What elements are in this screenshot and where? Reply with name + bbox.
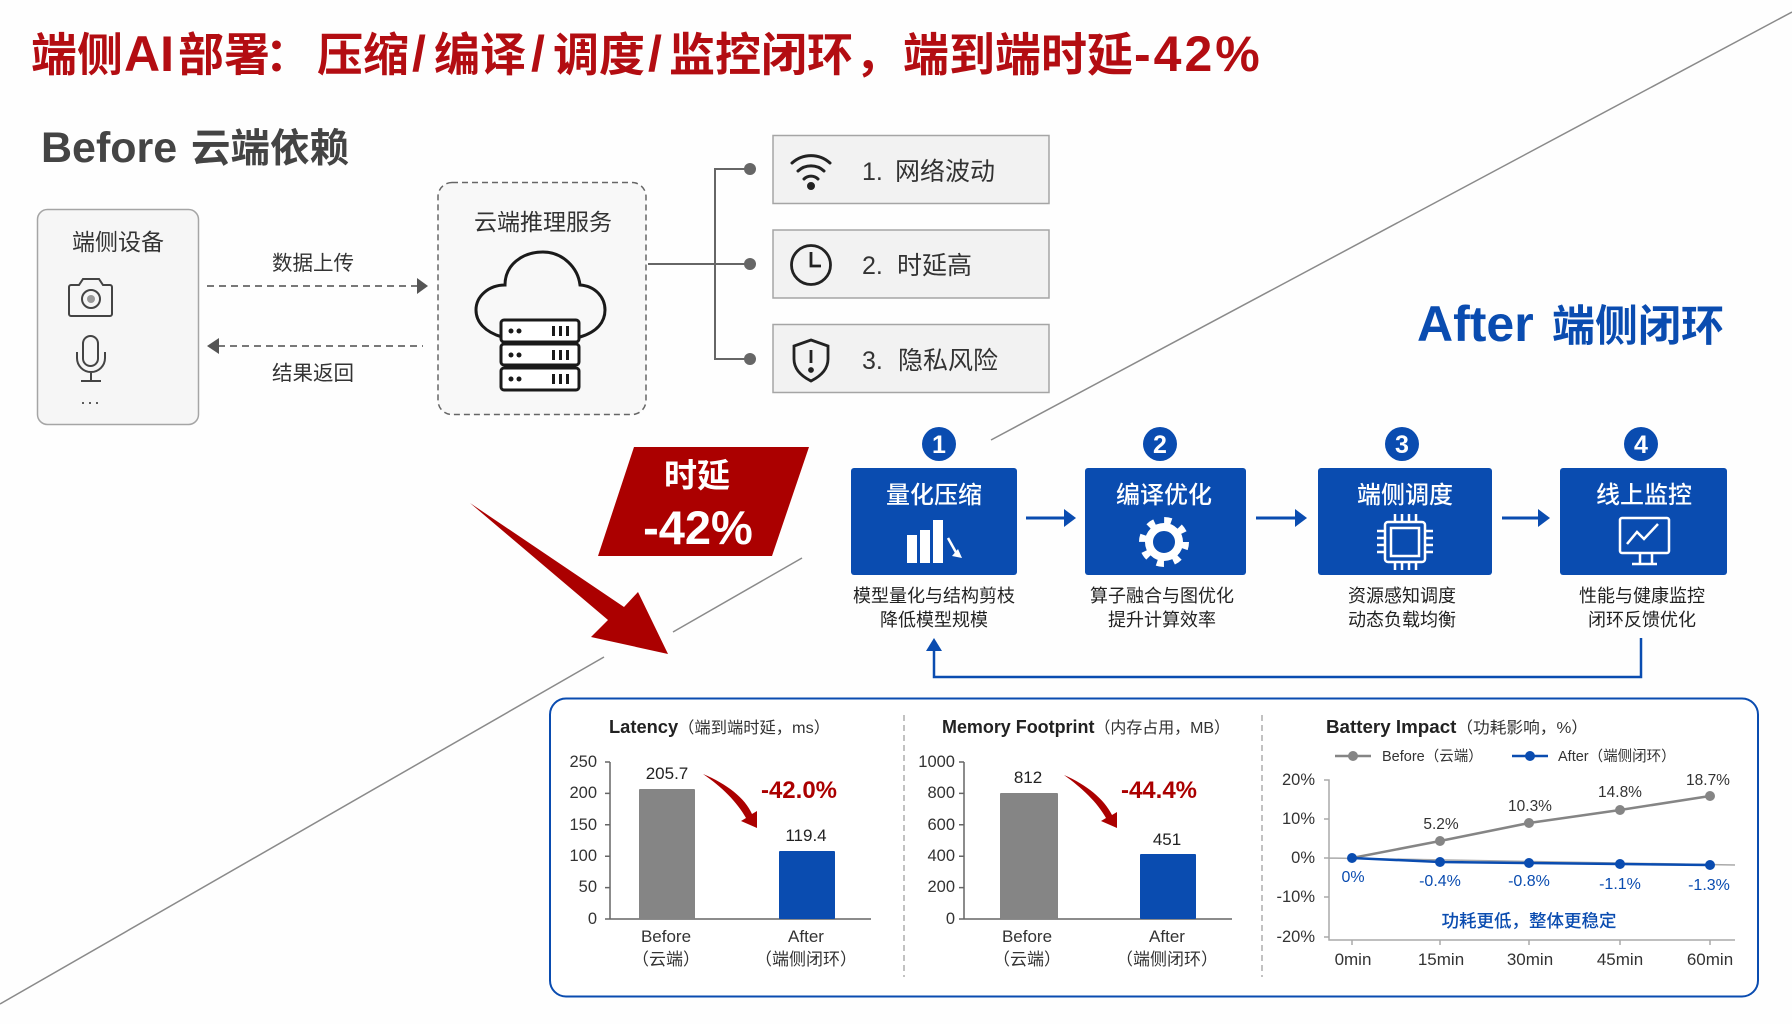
step 4: 线上监控	[1596, 482, 1692, 509]
step 1	[851, 427, 1017, 630]
icon: monitor	[1620, 518, 1669, 564]
chart: latency: 119.4	[785, 826, 827, 845]
chart: latency: Before	[641, 927, 691, 946]
bar: after	[779, 851, 835, 919]
chart: memory: 600	[927, 816, 955, 834]
chart: battery: 10%	[1282, 810, 1315, 828]
chart: latency: 50	[579, 878, 597, 896]
step 2 description: 提升计算效率	[1108, 610, 1216, 630]
step 2: 2	[1153, 431, 1167, 459]
step 3 description	[1348, 586, 1456, 630]
line: after	[1347, 853, 1715, 870]
chart: latency: 0	[588, 910, 597, 928]
chart: battery: 45min	[1597, 950, 1643, 969]
arrow: data upload	[207, 252, 428, 294]
arrow: feedback loop	[926, 638, 1641, 677]
chart: latency	[569, 717, 871, 969]
chart: memory: Before	[1002, 927, 1052, 946]
chart: battery: 60min	[1687, 950, 1733, 969]
step 2 description: 算子融合与图优化	[1090, 586, 1234, 606]
title: -42%	[1134, 26, 1263, 82]
step 4 description	[1579, 586, 1705, 630]
title: AI	[124, 26, 174, 82]
icon: clock	[792, 246, 830, 284]
step 4 description: 闭环反馈优化	[1588, 610, 1696, 630]
problem 1: network	[773, 136, 1049, 204]
title: 部署	[178, 29, 270, 81]
chart: battery: -0.8%	[1508, 873, 1550, 890]
chart: memory: 812	[1014, 768, 1042, 787]
title: 监控闭环	[669, 29, 853, 81]
chart: battery: 10.3%	[1508, 798, 1552, 815]
chart: latency: （云端）	[632, 950, 700, 969]
chart: memory: After	[1149, 927, 1185, 946]
chart: battery: 14.8%	[1598, 784, 1642, 801]
icon: cloud with servers	[476, 252, 605, 390]
panel: metrics	[550, 698, 1758, 996]
icon: shield	[794, 340, 828, 381]
arrow: step 1 to 2	[1026, 509, 1076, 527]
chart: battery: 0%	[1341, 869, 1365, 886]
title: ：	[265, 29, 311, 81]
chart: memory: （端侧闭环）	[1116, 950, 1218, 969]
callout: latency -42%	[598, 447, 809, 556]
arrow: data upload: 数据上传	[272, 252, 354, 275]
step 2: 编译优化	[1116, 482, 1212, 509]
legend	[1335, 748, 1676, 765]
delta label: -42.0%	[761, 777, 837, 804]
step 2 description	[1090, 586, 1234, 630]
chart: latency: 100	[569, 847, 597, 865]
chart title: Latency（端到端时延，ms）	[609, 717, 830, 737]
title: /	[648, 26, 662, 82]
chart title: Battery Impact （功耗影响，%）	[1326, 717, 1588, 737]
chart: battery: -1.3%	[1688, 877, 1730, 894]
chart: battery: 30min	[1507, 950, 1553, 969]
problem text: 隐私风险	[898, 347, 998, 375]
chart: battery	[1276, 717, 1735, 969]
chart: battery: 18.7%	[1686, 772, 1730, 789]
step 2	[1085, 427, 1246, 630]
heading: before: Before	[41, 124, 177, 172]
callout: latency -42%: -42%	[643, 501, 753, 554]
chart: latency: 250	[569, 753, 597, 771]
chart: memory: 451	[1153, 830, 1181, 849]
bar: before	[1000, 793, 1058, 919]
connector: problems bracket	[648, 163, 756, 365]
icon: wifi	[792, 156, 830, 188]
callout: latency -42%: 时延	[664, 457, 730, 494]
problem text: 1.	[862, 158, 883, 186]
step 4: 4	[1634, 431, 1648, 459]
delta label: -44.4%	[1121, 777, 1197, 804]
panel: cloud inference	[438, 182, 646, 414]
problem text: 2.	[862, 252, 883, 280]
title: /	[412, 26, 426, 82]
step 3 description: 动态负载均衡	[1348, 610, 1456, 630]
chart: latency: 150	[569, 816, 597, 834]
bar: before	[639, 789, 695, 919]
icon: gear	[1143, 521, 1185, 563]
step 4	[1560, 427, 1727, 630]
heading: after: After	[1417, 296, 1534, 352]
problem 3: privacy	[773, 324, 1049, 392]
chart: latency: （端侧闭环）	[755, 950, 857, 969]
chart: battery: 0%	[1291, 849, 1315, 867]
heading: before: 云端依赖	[191, 127, 349, 171]
legend: After（端侧闭环）	[1558, 748, 1676, 765]
chart: battery: -20%	[1276, 928, 1315, 946]
step 3 description: 资源感知调度	[1348, 586, 1456, 606]
step 1 description: 模型量化与结构剪枝	[853, 586, 1015, 606]
title: 编译	[434, 29, 526, 81]
icon: chip	[1377, 514, 1433, 570]
chart: battery: -1.1%	[1599, 876, 1641, 893]
device label: 端侧设备	[72, 229, 164, 255]
panel: device	[38, 210, 198, 424]
chart: battery: 0min	[1335, 950, 1371, 969]
step 1 description	[853, 586, 1015, 630]
title: 端到端时延	[903, 29, 1133, 81]
problem 2: latency	[773, 230, 1049, 298]
note: 功耗更低，整体更稳定	[1442, 911, 1616, 931]
chart: latency: 200	[569, 784, 597, 802]
bar: after	[1140, 854, 1196, 919]
chart: battery: 5.2%	[1423, 816, 1459, 833]
step 3: 3	[1395, 431, 1409, 459]
chart: memory: 1000	[918, 753, 955, 771]
step 4 description: 性能与健康监控	[1579, 586, 1705, 606]
arrow: big red	[470, 503, 668, 654]
arrow: result return: 结果返回	[272, 362, 354, 385]
chart: memory	[918, 717, 1232, 969]
arrow: step 3 to 4	[1502, 509, 1550, 527]
problem text: 3.	[862, 347, 883, 375]
arrow: reduction	[703, 774, 757, 828]
chart: memory: 0	[946, 910, 955, 928]
chart title: Memory Footprint（内存占用，MB）	[942, 717, 1230, 737]
chart: battery: 15min	[1418, 950, 1464, 969]
chart: memory: 400	[927, 847, 955, 865]
problem text: 时延高	[897, 252, 972, 280]
chart: latency: 205.7	[646, 764, 688, 783]
legend: Before（云端）	[1382, 748, 1483, 765]
problem text: 网络波动	[895, 158, 995, 186]
step 1: 1	[932, 431, 946, 459]
icon: bars down	[907, 520, 962, 563]
chart: memory: （云端）	[993, 950, 1061, 969]
heading: after: 端侧闭环	[1552, 303, 1724, 351]
title: 压缩	[317, 29, 409, 81]
chart: latency: After	[788, 927, 824, 946]
arrow: step 2 to 3	[1256, 509, 1307, 527]
title: ，	[855, 29, 901, 81]
icon: camera	[69, 279, 112, 316]
icon: microphone	[77, 336, 105, 381]
step 3	[1318, 427, 1492, 630]
chart: battery: -10%	[1276, 888, 1315, 906]
arrow: result return	[207, 338, 423, 385]
title: 调度	[553, 29, 645, 81]
chart: memory: 800	[927, 784, 955, 802]
step 3: 端侧调度	[1357, 482, 1453, 509]
title: /	[531, 26, 545, 82]
step 1 description: 降低模型规模	[880, 610, 988, 630]
chart: battery: 20%	[1282, 771, 1315, 789]
cloud label: 云端推理服务	[474, 209, 612, 235]
title: 端侧	[31, 29, 123, 81]
line: before	[1352, 791, 1715, 858]
chart: battery: -0.4%	[1419, 873, 1461, 890]
chart: memory: 200	[927, 878, 955, 896]
step 1: 量化压缩	[886, 482, 982, 509]
arrow: reduction	[1064, 775, 1117, 828]
ellipsis: ...	[80, 388, 102, 408]
